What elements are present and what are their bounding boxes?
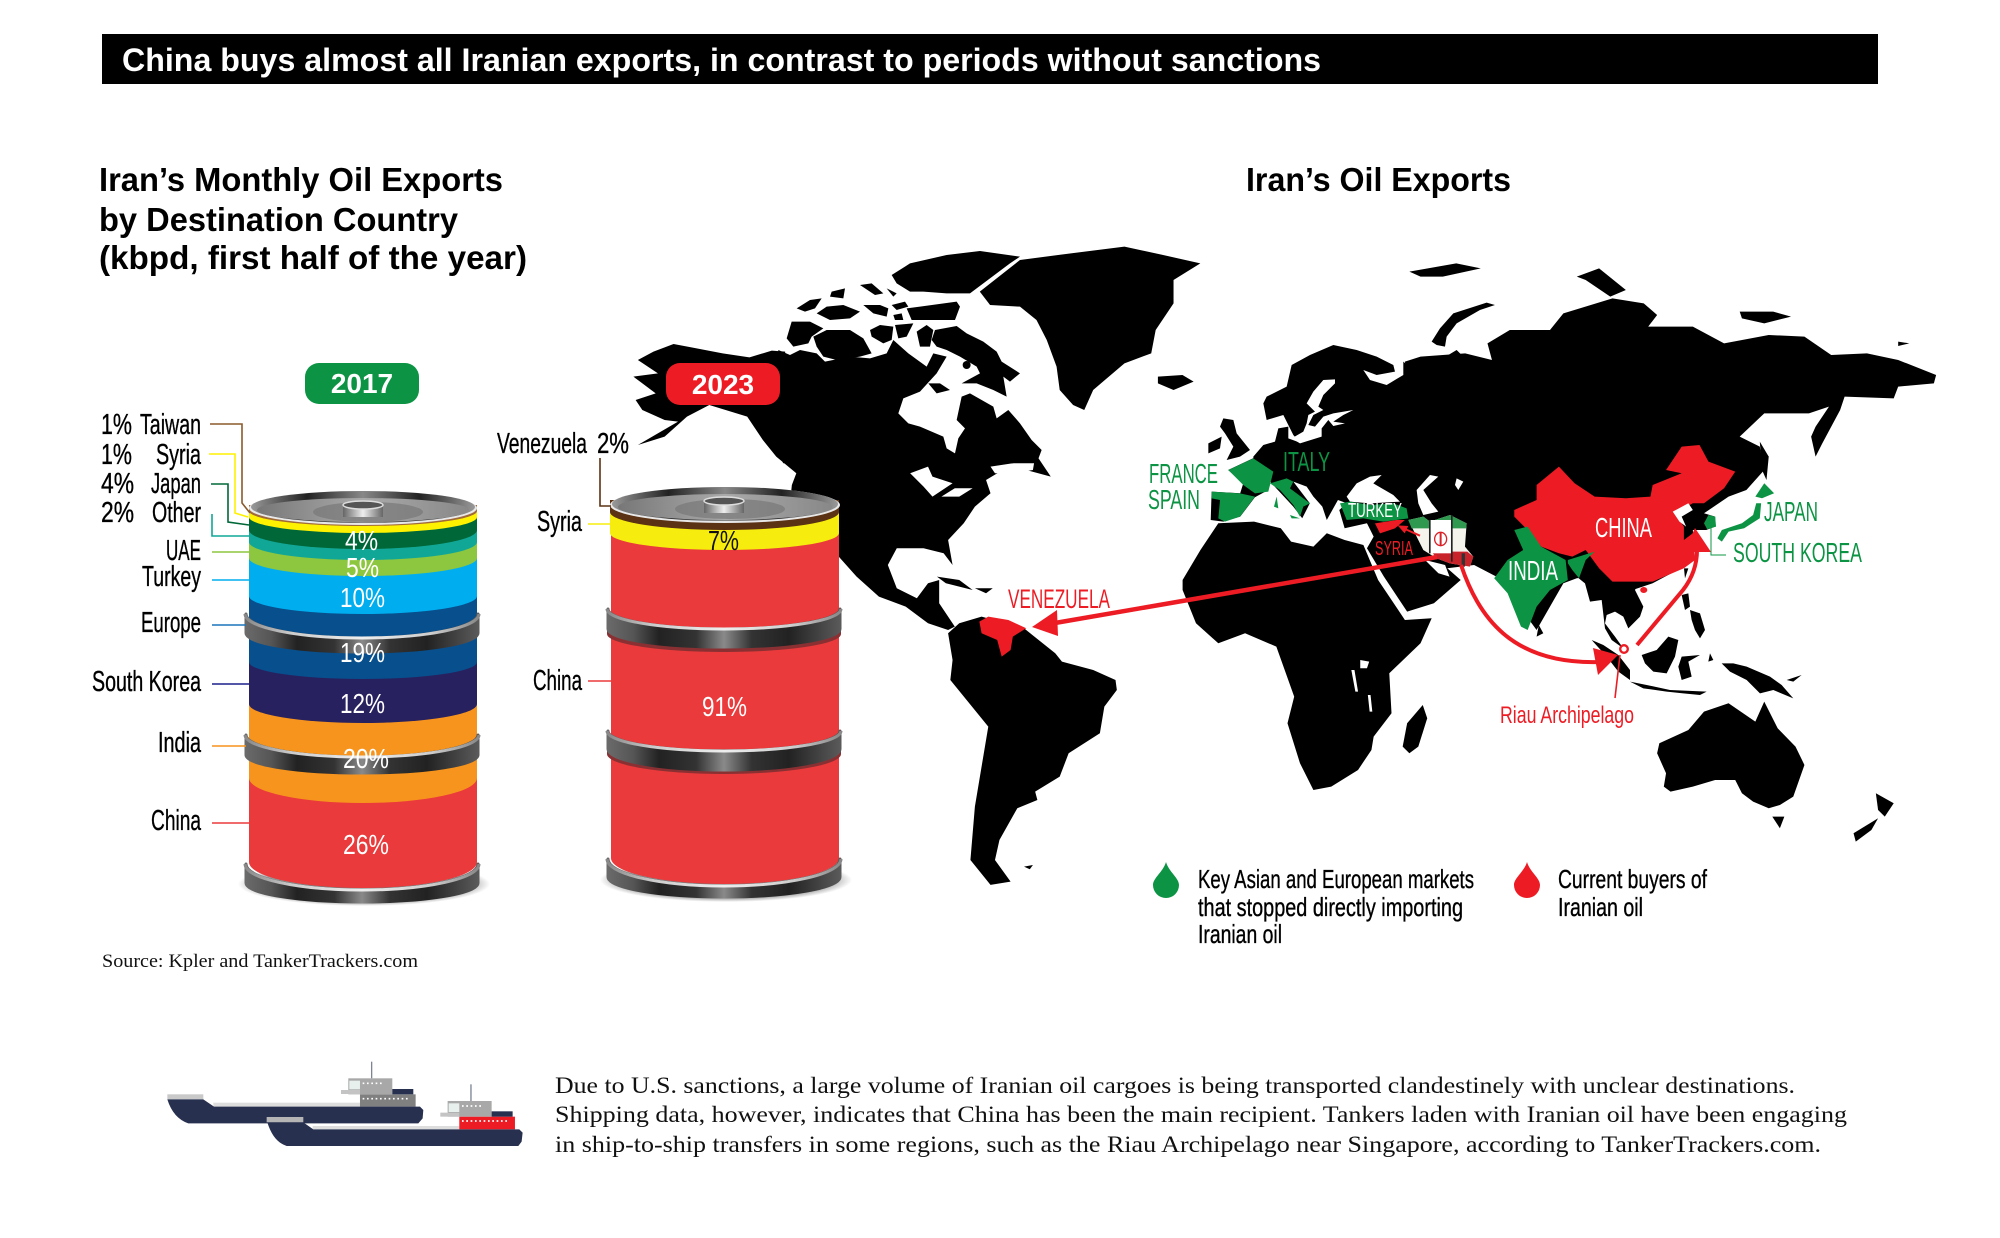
legend: current buyers: Current buyers of <box>1558 864 1708 894</box>
map: China highlighted <box>1494 445 1774 630</box>
destination labels: 1% <box>101 409 132 441</box>
ship: rear tanker <box>167 1062 423 1123</box>
leader lines <box>209 424 250 823</box>
percentage labels <box>340 525 389 860</box>
icon: red drop <box>1514 862 1540 898</box>
percentage labels: 10% <box>340 582 385 613</box>
percentage labels: 19% <box>340 637 385 668</box>
percentage labels: 5% <box>346 552 379 583</box>
barrel rings <box>607 609 841 897</box>
percentage labels: 26% <box>343 829 389 860</box>
arrow: Iran to Riau Archipelago <box>1461 565 1618 675</box>
percentage labels: 12% <box>340 688 385 719</box>
heading: monthly oil exports: (kbpd, first half of the year) <box>99 239 527 276</box>
icon: two tankers <box>167 1062 523 1146</box>
arrow: Iran to Syria <box>1398 525 1420 536</box>
percentage labels: 91% <box>702 691 747 722</box>
title banner <box>102 34 1878 84</box>
destination labels: Venezuela <box>497 428 588 460</box>
pill: 2023 <box>666 363 780 405</box>
legend: key markets: Iranian oil <box>1198 919 1282 949</box>
label: Turkey: TURKEY <box>1348 500 1402 522</box>
percentage labels: 20% <box>343 743 389 774</box>
barrel lid <box>249 491 477 525</box>
barrel segments <box>610 500 839 884</box>
map: seas and Mediterranean countries <box>1212 458 1473 567</box>
icon: Iran flag barrels <box>1408 515 1473 567</box>
barrel chart: 2017 <box>92 363 490 906</box>
label: Venezuela: VENEZUELA <box>1008 584 1110 614</box>
destination labels: Syria <box>156 439 202 471</box>
destination labels: UAE <box>166 535 201 567</box>
barrel chart: 2023 <box>497 363 852 902</box>
pill: 2023: 2023 <box>692 369 754 400</box>
destination labels: Japan <box>151 468 201 500</box>
icon: Riau location pin <box>1615 645 1628 698</box>
arrow: Riau Archipelago to China <box>1637 528 1711 645</box>
map: Eurasia, Africa and Oceania land <box>1183 263 1936 842</box>
destination labels: South Korea <box>92 666 202 698</box>
destination labels <box>497 428 629 697</box>
ship: front tanker <box>267 1084 523 1146</box>
label: South Korea: SOUTH KOREA <box>1733 537 1862 568</box>
destination labels: Europe <box>141 607 201 639</box>
label: France: FRANCE <box>1149 458 1218 489</box>
map: Americas land <box>633 247 1200 885</box>
barrel lid <box>610 487 840 523</box>
destination labels: Other <box>152 497 201 529</box>
label: India: INDIA <box>1508 555 1558 586</box>
title banner: China buys almost all Iranian exports, in contrast to periods without sanctions <box>122 42 1321 78</box>
destination labels: Syria <box>537 506 583 538</box>
heading: monthly oil exports: by Destination Country <box>99 201 459 238</box>
heading: monthly oil exports: Iran’s Monthly Oil Exports <box>99 161 503 198</box>
arrow: Iran to Venezuela <box>1032 557 1437 636</box>
legend: key markets: that stopped directly importing <box>1198 892 1463 922</box>
world map <box>633 247 1936 885</box>
legend: key markets <box>1153 862 1474 949</box>
label: Syria: SYRIA <box>1375 538 1413 560</box>
body text: in ship-to-ship transfers in some regions, such as the Riau Archipelago near Singapore, according to TankerTrackers.com. <box>555 1132 1821 1158</box>
legend: current buyers <box>1514 862 1708 922</box>
destination labels: India <box>158 727 202 759</box>
barrel segments <box>249 505 477 888</box>
map: South Korea highlighted <box>1704 515 1716 529</box>
map: Canadian Arctic and Hudson Bay <box>778 251 1042 463</box>
icon: green drop <box>1153 862 1179 898</box>
map: India highlighted <box>1494 527 1568 630</box>
destination labels: 2% <box>101 497 134 529</box>
map: Japan highlighted <box>1755 483 1774 498</box>
pill: 2017 <box>305 363 419 404</box>
destination labels: China <box>533 665 583 697</box>
destination labels: 4% <box>101 468 134 500</box>
destination labels: 1% <box>101 439 132 471</box>
leader lines <box>588 458 613 681</box>
map labels <box>1008 446 1862 729</box>
leader: South Korea <box>1711 527 1726 555</box>
map: South East Asia and Indonesia <box>1560 555 1802 698</box>
label: Japan: JAPAN <box>1764 496 1818 527</box>
pill: 2017: 2017 <box>331 368 393 399</box>
destination labels: China <box>151 805 202 837</box>
map: Venezuela highlighted <box>979 617 1026 657</box>
legend: current buyers: Iranian oil <box>1558 892 1643 922</box>
percentage labels <box>702 525 747 722</box>
barrel rings <box>245 614 479 902</box>
body text: Shipping data, however, indicates that China has been the main recipient. Tankers laden with Iranian oil have been engaging <box>555 1102 1847 1128</box>
destination labels: 2% <box>597 428 629 460</box>
source note: Source: Kpler and TankerTrackers.com <box>102 951 418 972</box>
label: Spain: SPAIN <box>1148 484 1200 515</box>
map: northern Europe, Scandinavia and Britain <box>1208 303 1500 467</box>
body text <box>555 1073 1847 1158</box>
destination labels: Turkey <box>142 561 201 593</box>
destination labels: Taiwan <box>140 409 201 441</box>
legend: key markets: Key Asian and European markets <box>1198 864 1474 894</box>
label: China: CHINA <box>1595 512 1652 543</box>
label: Riau Archipelago: Riau Archipelago <box>1500 702 1634 729</box>
percentage labels: 7% <box>708 525 739 556</box>
heading: monthly oil exports <box>99 161 527 276</box>
heading: Iran's oil exports: Iran’s Oil Exports <box>1246 161 1511 198</box>
body text: Due to U.S. sanctions, a large volume of Iranian oil cargoes is being transported clandestinely with unclear destinations. <box>555 1073 1795 1099</box>
percentage labels: 4% <box>345 525 378 556</box>
destination labels <box>92 409 202 837</box>
label: Italy: ITALY <box>1283 446 1330 477</box>
